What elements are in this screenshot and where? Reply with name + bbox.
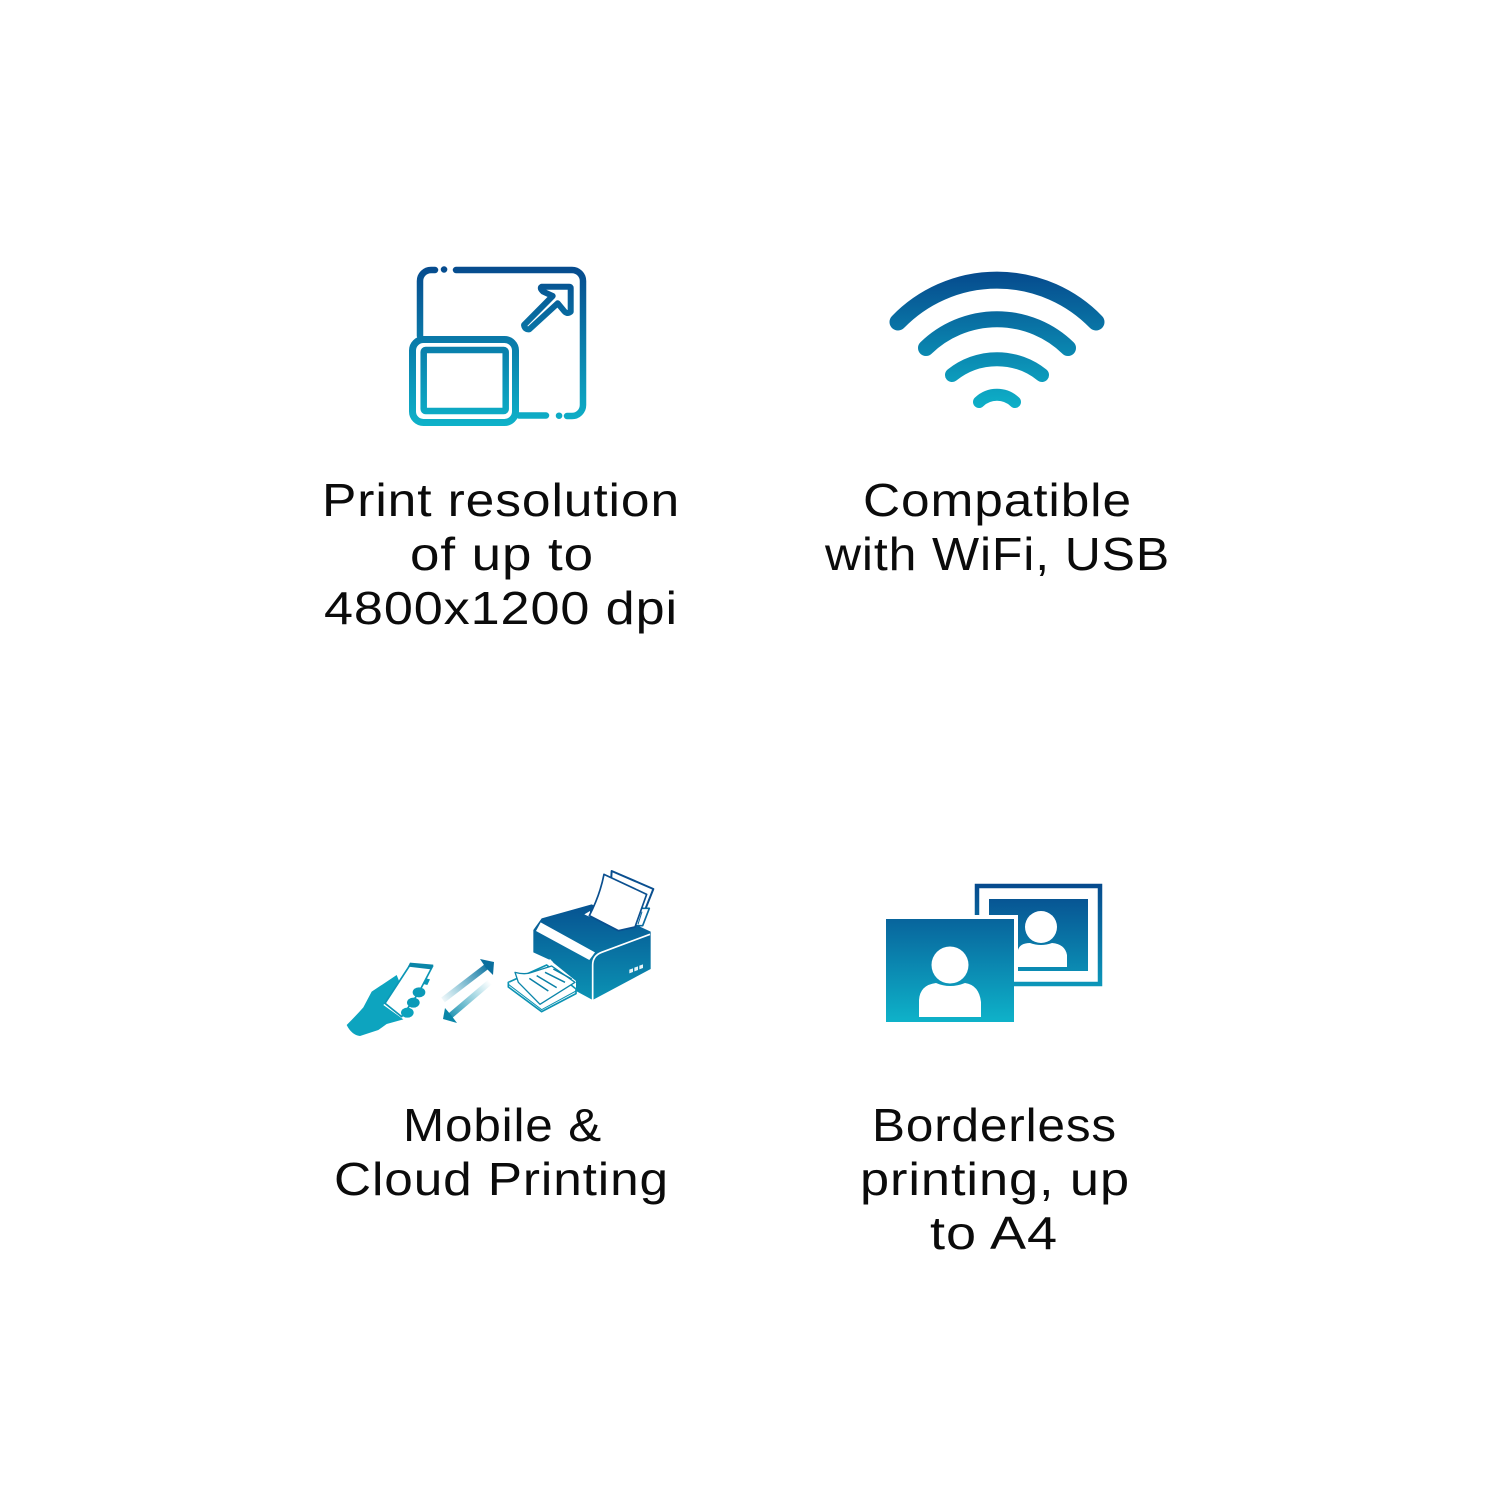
frame dots (444, 270, 559, 416)
bordered photo person (1018, 911, 1067, 967)
text: print resolution: of up to (410, 528, 594, 580)
bordered photo image (989, 899, 1088, 971)
text: mobile and cloud (334, 1099, 669, 1205)
bordered photo frame (977, 886, 1100, 984)
borderless photo (886, 919, 1014, 1022)
hand holding phone (347, 963, 433, 1036)
borderless photo person (919, 946, 981, 1017)
icon: print resolution resize (412, 270, 583, 422)
output tray (508, 965, 576, 1012)
text: print resolution: 4800x1200 dpi (324, 582, 678, 634)
text: mobile and cloud: Mobile & (403, 1099, 602, 1151)
text: compatible (824, 474, 1170, 580)
printer buttons (629, 964, 643, 973)
small frame inner (424, 350, 506, 411)
icon: mobile and cloud printing (347, 871, 653, 1036)
icon: borderless photos (886, 886, 1100, 1022)
text: compatible: Compatible (863, 474, 1132, 526)
front sheet (589, 874, 647, 931)
icon: wifi (898, 280, 1096, 402)
white gutter (972, 915, 1018, 989)
text: mobile and cloud: Cloud Printing (334, 1153, 669, 1205)
text: print resolution (322, 474, 680, 634)
text: borderless: to A4 (930, 1207, 1058, 1259)
arrows (443, 959, 494, 1023)
outer frame with gaps (420, 270, 583, 416)
text: borderless (860, 1099, 1130, 1259)
printer paper stack (610, 871, 653, 926)
diagonal arrow (524, 287, 571, 329)
text: borderless: Borderless (872, 1099, 1117, 1151)
text: borderless: printing, up (860, 1153, 1130, 1205)
printer body (533, 904, 651, 1000)
text: print resolution: Print resolution (322, 474, 680, 526)
small frame (412, 340, 516, 422)
printer (508, 871, 653, 1012)
text: compatible: with WiFi, USB (824, 528, 1170, 580)
printer white edges (536, 922, 595, 960)
